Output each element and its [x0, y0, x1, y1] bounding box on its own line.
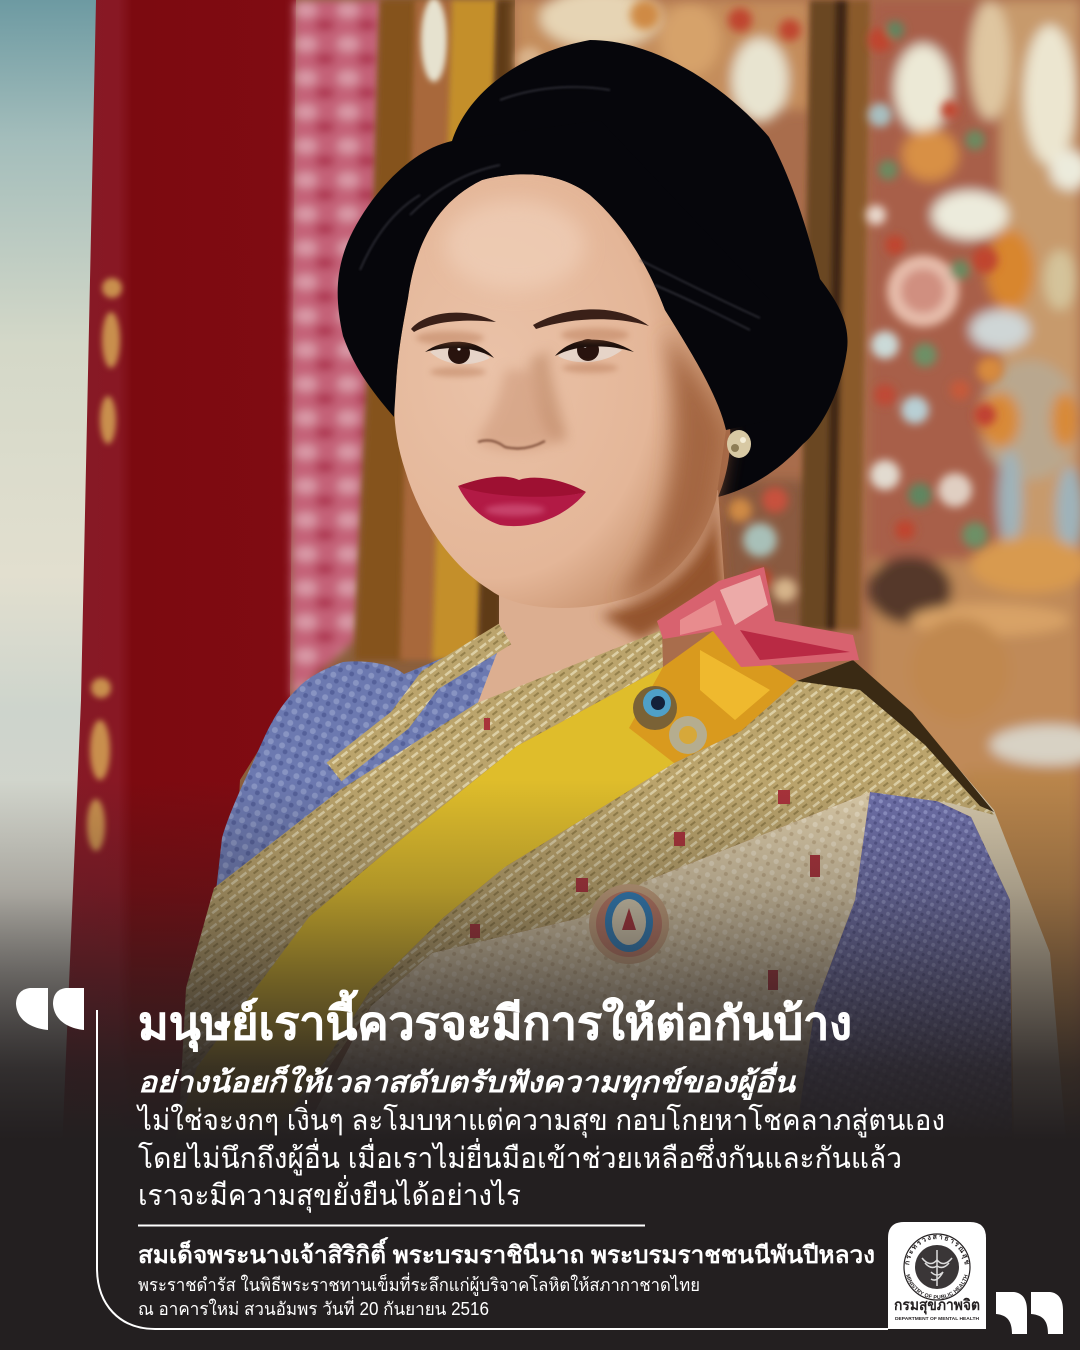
forehead highlight — [445, 200, 585, 290]
mural strip behind gold column — [400, 0, 455, 660]
shadow beneath the chin — [600, 500, 725, 640]
attribution name: สมเด็จพระนางเจ้าสิริกิติ์ พระบรมราชินีนาถ พระบรมราชชนนีพันปีหลวง — [138, 1237, 875, 1269]
pale wall at left — [0, 0, 96, 1087]
logo seal english lettering: MINISTRY OF PUBLIC HEALTH — [906, 1274, 968, 1299]
closing quotation mark — [996, 1292, 1063, 1334]
cream panel with badge — [326, 792, 870, 1102]
nose — [476, 370, 565, 451]
brocade band on the left of the yellow sash — [178, 630, 663, 1140]
yellow royal sash — [189, 667, 674, 1101]
lavender blouse right sleeve — [802, 792, 1012, 1100]
hair highlights — [360, 87, 760, 330]
quote text block — [136, 1061, 945, 1213]
logo: Department of Mental Health — [888, 1222, 986, 1329]
quote line 3: โดยไม่นึกถึงผู้อื่น เมื่อเราไม่ยื่นมือเข้าช่วยเหลือซึ่งกันและกันแล้ว — [138, 1138, 902, 1176]
logo winged caduceus emblem — [922, 1250, 952, 1286]
lavender blouse at left shoulder — [215, 632, 505, 900]
patterned pink drape — [290, 0, 382, 700]
source line 1: พระราชดำรัส ในพิธีพระราชทานเข็มที่ระลึกแก่ผู้บริจาคโลหิตให้สภากาชาดไทย — [138, 1272, 700, 1296]
neck — [477, 490, 725, 705]
opening quotation mark — [16, 988, 84, 1030]
quote line 1 emphasis: อย่างน้อยก็ให้เวลาสดับตรับฟังความทุกข์ของผู้อื่น — [138, 1061, 796, 1101]
shaded right side of the face — [620, 330, 726, 600]
red curtain — [62, 0, 296, 1150]
royal order brooch — [629, 631, 797, 763]
lips — [458, 477, 586, 526]
face — [394, 174, 726, 608]
earring — [727, 430, 751, 458]
dark frame stripe — [478, 0, 518, 660]
logo seal ring — [904, 1234, 970, 1300]
column stripes on the mural — [800, 0, 870, 630]
eyebrows — [411, 309, 649, 332]
quotation frame line — [97, 1010, 888, 1329]
logo seal lettering: กระทรวงสาธารณสุข — [905, 1234, 969, 1265]
eye makeup shadow — [416, 328, 629, 377]
gold column — [432, 0, 497, 660]
mural tapestry on the right — [515, 0, 1080, 1150]
logo english name: DEPARTMENT OF MENTAL HEALTH — [895, 1316, 980, 1322]
cream panel at the top of the strip — [421, 0, 447, 82]
quote line 4: เราจะมีความสุขยั่งยืนได้อย่างไร — [138, 1175, 521, 1213]
headline: มนุษย์เรานี้ควรจะมีการให้ต่อกันบ้าง — [138, 989, 852, 1052]
royal badge — [589, 884, 669, 964]
shoulder outer hem — [937, 763, 1062, 1089]
nose side shadow — [530, 350, 566, 440]
divider under quote — [138, 1224, 645, 1226]
pink ribbon bow — [657, 567, 859, 667]
brocade band on the right of the yellow sash — [302, 660, 994, 1096]
small red motifs on the brocade — [470, 718, 820, 990]
dark gradient overlay — [0, 780, 1080, 1140]
dark shoulder edge — [797, 660, 994, 812]
floral speckles on the mural — [517, 0, 1003, 602]
gold curtain tassels — [87, 278, 122, 851]
front hair sweeping over forehead — [338, 141, 738, 430]
eyes — [425, 339, 634, 364]
quote line 2: ไม่ใช่จะงกๆ เงิ่นๆ ละโมบหาแต่ความสุข กอบโกยหาโชคลาภสู่ตนเอง — [136, 1100, 945, 1138]
logo thai name: กรมสุขภาพจิต — [894, 1296, 980, 1315]
hair bun behind the head — [450, 40, 848, 497]
bronze frame next to drape — [355, 0, 420, 660]
brocade collar strip — [334, 634, 505, 772]
source line 2: ณ อาคารใหม่ สวนอัมพร วันที่ 20 กันยายน 2516 — [138, 1296, 489, 1319]
